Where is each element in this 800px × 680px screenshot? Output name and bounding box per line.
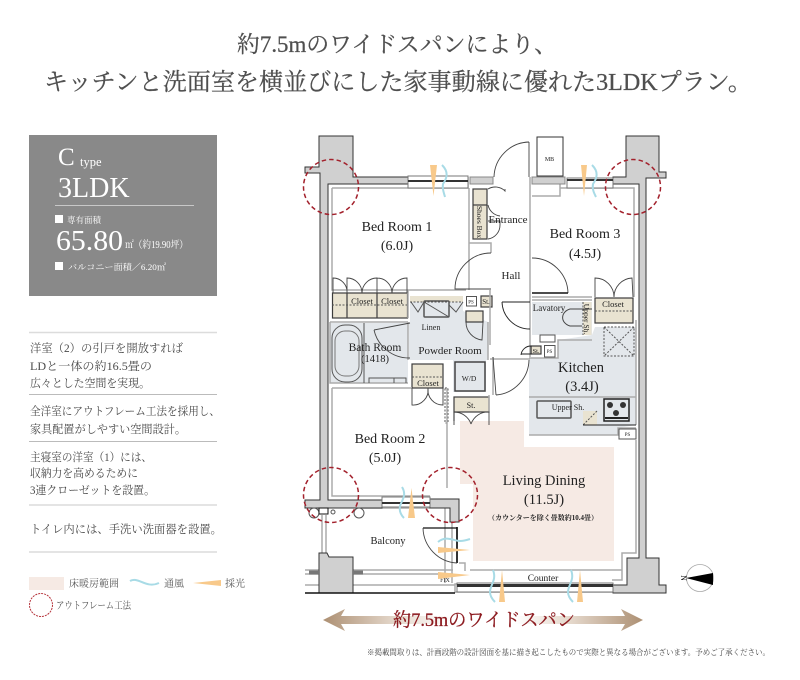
room labels: Entrance: [488, 214, 528, 226]
room labels: Closet: [602, 299, 624, 309]
room labels: (11.5J): [524, 492, 564, 508]
icon: compass: [679, 564, 714, 592]
room labels: St.: [482, 298, 490, 306]
room labels: Balcony: [370, 536, 406, 547]
text block: features: トイレ内には、手洗い洗面器を設置。: [30, 522, 222, 536]
thin partition lines: [305, 177, 636, 593]
room labels: Linen: [422, 323, 440, 332]
doors: [333, 142, 633, 563]
room labels: MB: [545, 157, 554, 163]
room labels: (5.0J): [369, 451, 401, 466]
text block: features: LDと一体の約16.5畳の: [30, 359, 152, 373]
room labels: St.: [532, 348, 540, 355]
floor plan: [304, 136, 666, 602]
area figures: 65.80: [56, 226, 123, 257]
room labels: Lavatory: [533, 303, 566, 313]
area figures: 専有面積: [67, 215, 103, 225]
text block: features: 収納力を高めるために: [30, 466, 138, 480]
room labels: Bed Room 2: [355, 432, 425, 447]
room labels: Hall: [502, 270, 520, 282]
outframe markers: [304, 160, 660, 522]
title: キッチンと洗面室を横並びにした家事動線に優れた3LDKプラン。: [44, 69, 752, 96]
room labels: Kitchen: [558, 360, 605, 376]
room labels: Bed Room 1: [362, 220, 432, 235]
legend: 床暖房範囲: [69, 577, 119, 590]
wide span label: 約7.5mのワイドスパン: [393, 609, 575, 631]
room labels: Closet: [417, 378, 439, 388]
room labels: PS: [468, 300, 474, 306]
panel: unit type: [29, 135, 217, 296]
type name: C: [58, 144, 75, 171]
room labels: [349, 157, 630, 584]
room labels: St.: [467, 401, 475, 410]
icon: compass: N: [679, 575, 688, 581]
area figures: バルコニー面積／6.20㎡: [68, 262, 167, 272]
room labels: W/D: [462, 374, 477, 383]
legend: 通風: [164, 578, 184, 590]
room labels: (3.4J): [565, 379, 599, 395]
windows: [382, 176, 613, 592]
text block: features: 3連クローゼットを設置。: [30, 483, 155, 497]
room labels: (6.0J): [381, 239, 413, 254]
area figures: [55, 215, 188, 272]
floor heating area: [460, 421, 614, 561]
text block: features: 全洋室にアウトフレーム工法を採用し、: [30, 404, 220, 418]
room labels: (4.5J): [569, 247, 601, 262]
room labels: Powder Room: [418, 345, 482, 357]
title: 約7.5mのワイドスパンにより、: [237, 32, 557, 57]
footnote: ※掲載間取りは、計画段階の設計図面を基に描き起こしたもので実際と異なる場合がございます。予めご了承ください。: [367, 647, 770, 657]
type name: 3LDK: [58, 173, 130, 204]
icons: light: [408, 165, 587, 602]
wet room floors: [330, 296, 636, 435]
room labels: Closet: [351, 296, 373, 306]
text block: features: [29, 332, 222, 552]
storage: [332, 189, 633, 425]
room labels: PS: [625, 433, 630, 438]
room labels: Bed Room 3: [550, 227, 620, 242]
text block: features: 洋室（2）の引戸を開放すれば: [30, 341, 183, 355]
room labels: (1418): [361, 354, 389, 365]
icons: wind: [400, 165, 597, 602]
legend: アウトフレーム工法: [56, 599, 132, 612]
room labels: Bath Room: [349, 342, 401, 354]
arrow: wide span: [323, 609, 643, 631]
room labels: FIX: [440, 578, 450, 584]
legend: [29, 577, 245, 616]
title: [44, 32, 752, 96]
room labels: Counter: [528, 574, 559, 584]
room labels: Upper Sh.: [552, 403, 584, 412]
type name: type: [80, 155, 102, 169]
room labels: Shoes Box: [475, 206, 484, 238]
fixtures: [309, 296, 636, 518]
text block: features: 広々とした空間を実現。: [30, 376, 150, 390]
room labels: Closet: [381, 296, 403, 306]
icon: stove burners: [607, 402, 626, 416]
text block: features: 主寝室の洋室（1）には、: [30, 450, 152, 464]
room labels: （カウンターを除く畳数約10.4畳）: [488, 513, 598, 522]
type name: [58, 144, 130, 204]
room labels: PS: [547, 350, 552, 355]
text block: features: 家具配置がしやすい空間設計。: [30, 422, 186, 436]
walls: [305, 136, 666, 593]
area figures: ㎡（約19.90坪）: [125, 238, 188, 251]
room labels: Upper Sh.: [582, 304, 591, 334]
legend: 採光: [225, 577, 245, 590]
room labels: Living Dining: [503, 473, 585, 489]
